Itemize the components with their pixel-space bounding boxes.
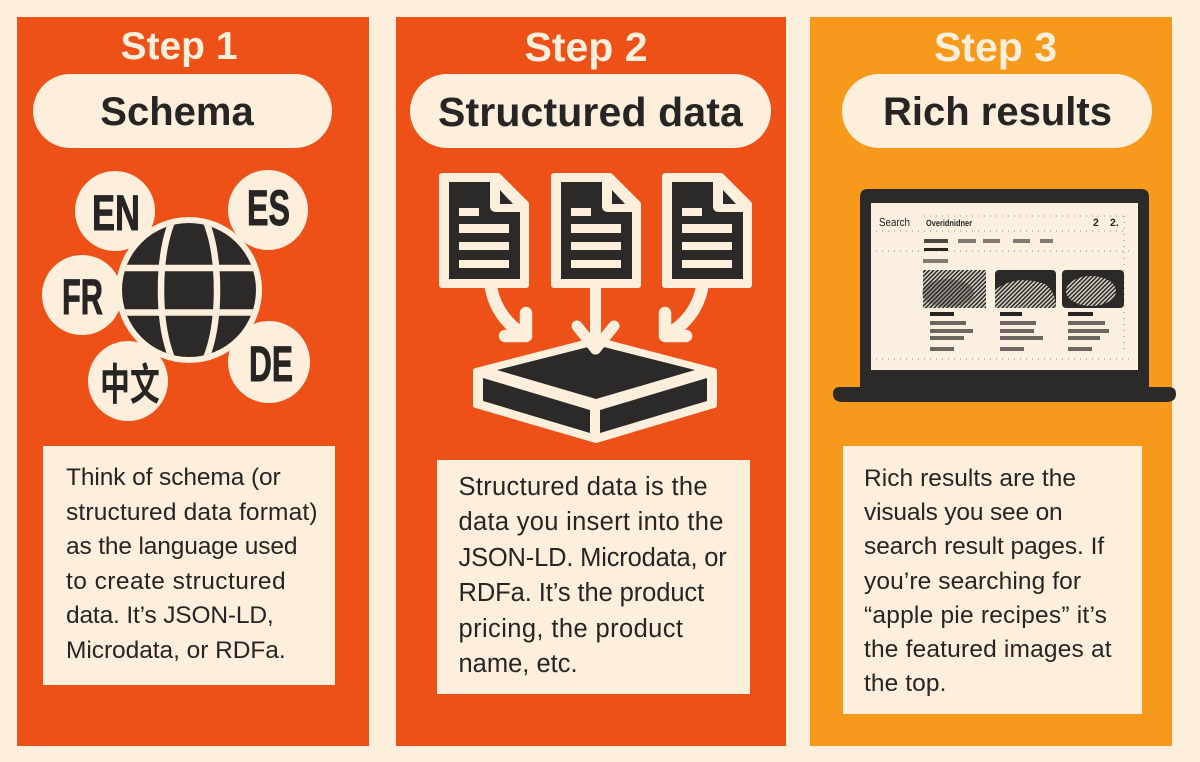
icon: globe with language bubbles xyxy=(42,170,310,421)
heading: step 2: Step 2 xyxy=(524,24,648,70)
text box: structured data description: JSON-LD. Microdata, or xyxy=(458,544,727,572)
bubble: DE xyxy=(228,321,310,403)
icon: laptop showing search results xyxy=(833,189,1176,402)
heading: step 3: Step 3 xyxy=(934,24,1057,70)
bubble: FR: FR xyxy=(62,269,103,325)
text box: schema description: data. It’s JSON-LD, xyxy=(66,602,274,629)
bubble: DE: DE xyxy=(249,336,293,392)
text box: rich results description: “apple pie recipes” it’s xyxy=(864,602,1107,629)
result tabs xyxy=(923,239,1053,263)
panel: step 3 rich results xyxy=(810,17,1172,746)
panel: step 2 structured data xyxy=(396,17,786,746)
pill heading: schema xyxy=(33,74,332,148)
text box: structured data description: name, etc. xyxy=(458,650,578,678)
text box: structured data description: RDFa. It’s the product xyxy=(458,579,704,607)
text box: schema description: Think of schema (or xyxy=(66,464,281,491)
text box: structured data description: pricing, the product xyxy=(458,615,683,643)
search bar text: 2 xyxy=(1093,217,1099,229)
bubble: Chinese xyxy=(88,341,168,421)
search bar text: 2. xyxy=(1110,217,1119,229)
text box: rich results description: Rich results are the xyxy=(864,465,1076,492)
search bar text: Search xyxy=(879,217,910,229)
laptop screen xyxy=(871,203,1138,370)
bubble: EN xyxy=(75,171,155,251)
icon: globe xyxy=(117,217,262,363)
icon: documents flowing into a database block xyxy=(439,173,752,443)
pill heading: schema: Schema xyxy=(100,90,254,134)
text box: rich results description: the featured images at xyxy=(864,636,1112,663)
bubble: EN: EN xyxy=(92,185,140,241)
panel: step 1 schema xyxy=(17,17,369,746)
arrow: right document to block xyxy=(665,288,702,336)
text box: rich results description: visuals you see on xyxy=(864,499,1063,526)
icon: document 3 xyxy=(665,176,749,285)
icon: document 2 xyxy=(554,176,638,285)
bubble: FR xyxy=(42,255,122,335)
text box: schema description: structured data format) xyxy=(66,499,318,526)
result card 2 xyxy=(995,270,1056,351)
text box: rich results description: the top. xyxy=(864,670,947,697)
text box: schema description: Microdata, or RDFa. xyxy=(66,637,286,664)
bubble: ES xyxy=(228,170,308,250)
text box: schema description xyxy=(43,446,335,685)
search bar text: Overidnidner xyxy=(926,218,972,228)
pill heading: rich results: Rich results xyxy=(883,90,1112,134)
pill heading: rich results xyxy=(842,74,1152,148)
text box: rich results description: you’re searching for xyxy=(864,568,1081,595)
result card 3 xyxy=(1062,270,1124,351)
icon: database block xyxy=(476,340,714,440)
text box: schema description: to create structured xyxy=(66,568,286,595)
text box: structured data description: data you insert into the xyxy=(458,508,724,536)
heading: step 1: Step 1 xyxy=(120,25,238,68)
bubble: Chinese: 中文 xyxy=(100,361,160,410)
text box: schema description: as the language used xyxy=(66,533,297,560)
arrow: left document to block xyxy=(491,288,526,336)
icon: document 1 xyxy=(442,176,526,285)
laptop body xyxy=(833,189,1176,402)
result card 1 xyxy=(922,270,986,351)
pill heading: structured data xyxy=(410,74,771,148)
text box: structured data description xyxy=(437,460,750,694)
bubble: ES: ES xyxy=(247,180,290,236)
text box: structured data description: Structured data is the xyxy=(458,473,708,501)
text box: rich results description: search result pages. If xyxy=(864,533,1104,560)
arrow: centre document to block xyxy=(577,288,614,349)
search bar text xyxy=(879,217,1119,229)
text box: rich results description xyxy=(843,446,1142,714)
pill heading: structured data: Structured data xyxy=(438,89,743,135)
